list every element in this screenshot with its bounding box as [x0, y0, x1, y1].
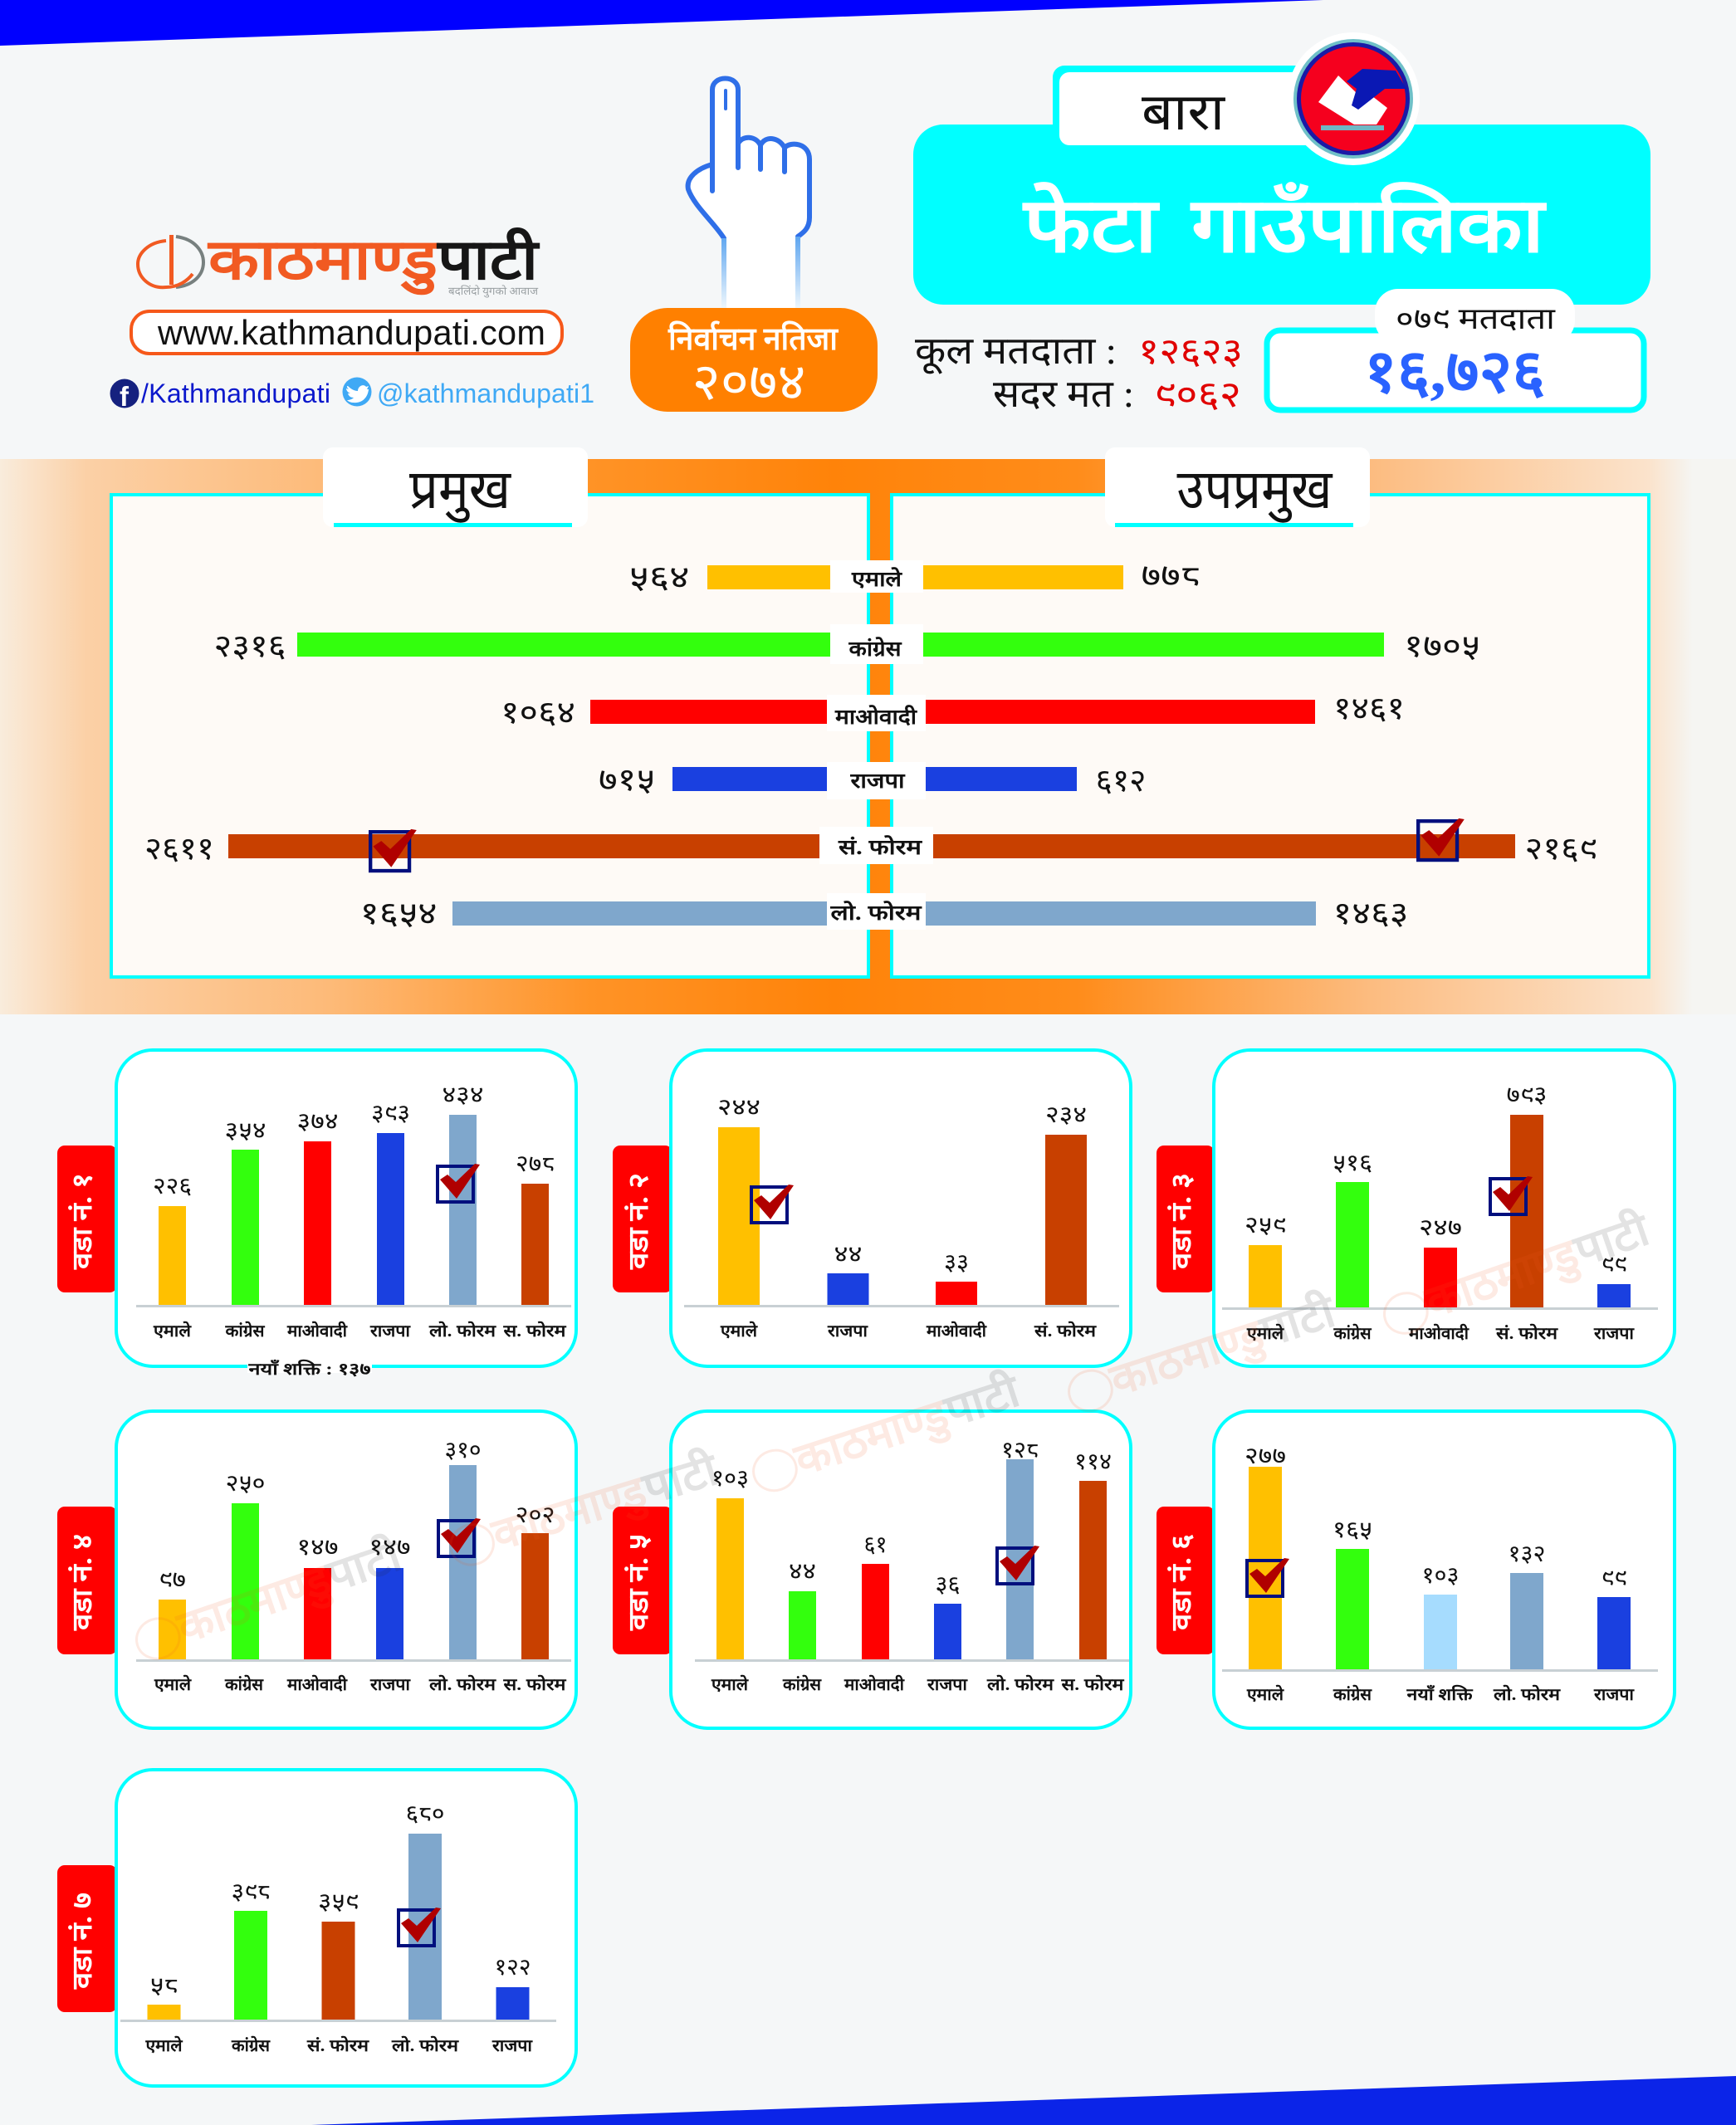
website pill: www.kathmandupati.com [157, 313, 545, 352]
ward 5 values [712, 1438, 1112, 1598]
comparison row: Congress: २३१६ [214, 629, 286, 664]
ward 3 labels [1246, 1323, 1635, 1343]
ward 1 values: २२६ [153, 1174, 192, 1199]
ward 1 card [116, 1050, 576, 1366]
ward 4 labels: एमाले [154, 1674, 193, 1694]
ward 1 note: नयाँ शक्ति : १३७ [247, 1359, 370, 1379]
watermark: logo over ward 4: काठमाण्डु [170, 1554, 340, 1656]
ward 1 labels: राजपा [369, 1322, 411, 1341]
comparison row: RJP: ७१५ [599, 763, 655, 798]
turnout value: ९०६२ [1154, 374, 1241, 415]
ward 4 labels: राजपा [369, 1676, 411, 1694]
logo: Kathmandupati [138, 227, 540, 298]
panel: ward 1 [57, 1050, 576, 1379]
ward 5 labels: लो. फोरम [986, 1674, 1054, 1694]
heading: deputy mayor [1105, 447, 1370, 527]
ward 1 bars [136, 1115, 571, 1307]
ward 6 values [1245, 1444, 1627, 1591]
icon: ballot emblem [1287, 32, 1420, 165]
ward 7 values: ६८० [405, 1801, 445, 1827]
ward 7 values: १२२ [495, 1955, 531, 1981]
watermark: logo between wards 4 and 5: काठमाण्डु [486, 1466, 654, 1564]
ward 6 values: १६५ [1333, 1517, 1372, 1543]
ward 7 labels: कांग्रेस [231, 2035, 271, 2055]
panel: ward 4 [57, 1411, 576, 1728]
ward 2 values: २४४ [717, 1095, 760, 1121]
icon: ward 1 winner check [438, 1164, 480, 1202]
comparison row: Loktantrik Forum: १४६३ [1333, 896, 1408, 931]
ward 4 values: १४७ [297, 1535, 339, 1561]
ward 7 labels: लो. फोरम [391, 2035, 459, 2055]
ward 3 labels: राजपा [1593, 1325, 1635, 1343]
ward 3 labels: माओवादी [1408, 1323, 1469, 1343]
icon: ward 3 winner check [1490, 1176, 1533, 1214]
ward 5 labels: राजपा [927, 1676, 968, 1694]
ward 6 values: २७७ [1245, 1444, 1286, 1469]
municipality title: फेटा [1022, 182, 1161, 268]
ward 7 values: ३५९ [318, 1889, 359, 1915]
ward 6 tab [1157, 1507, 1215, 1654]
watermark: logo between wards 2 and 3: पाटी [1253, 1284, 1342, 1357]
comparison row: RJP: ६१२ [1096, 764, 1146, 799]
ward 1 tab [57, 1146, 117, 1292]
ward 1 values: ३७४ [297, 1109, 339, 1135]
comparison row: Sanghiya Forum: २१६९ [1524, 832, 1597, 867]
comparison row: Congress: १७०५ [1404, 629, 1480, 664]
municipality title [1022, 182, 1548, 268]
ward 4 labels: कांग्रेस [224, 1674, 264, 1694]
ward 7 labels [144, 2035, 533, 2055]
icon: ward 2 winner check [751, 1185, 794, 1223]
comparison row: Congress [214, 624, 1480, 664]
panel: deputy mayor [892, 495, 1649, 977]
comparison row: RJP: राजपा [849, 770, 906, 793]
ward 7 tab [57, 1865, 117, 2012]
ward 6 labels [1246, 1684, 1635, 1704]
ward 2 labels: सं. फोरम [1034, 1321, 1097, 1341]
voters box heading tab [1375, 289, 1575, 344]
ward 5 bars [695, 1459, 1129, 1662]
comparison row: UML [629, 559, 1201, 595]
ward 5 values: १०३ [712, 1466, 749, 1492]
comparison row: Sanghiya Forum [144, 827, 1597, 867]
ward 4 tab [57, 1507, 117, 1654]
municipality title: गाउँपालिका [1190, 182, 1548, 268]
icon: twitter [342, 377, 372, 407]
watermark: logo between wards 4 and 5 [443, 1443, 726, 1576]
watermark: logo over ward 5 [746, 1364, 1028, 1502]
ward 7 labels: राजपा [491, 2037, 533, 2055]
ward 3 values: ९९ [1601, 1252, 1627, 1277]
ward 4 values: २०२ [515, 1502, 555, 1528]
ward 4 values: २५० [226, 1471, 266, 1497]
panel: ward 2 [613, 1050, 1131, 1366]
bottom blue corner band [311, 2076, 1736, 2125]
ward 6 card [1214, 1411, 1675, 1728]
icon: facebook [110, 379, 139, 412]
watermark: logo over ward 5: काठमाण्डु [788, 1389, 957, 1489]
comparison row: Maoist [501, 691, 1405, 731]
ward 5 labels: माओवादी [844, 1674, 905, 1694]
ward 1 labels: माओवादी [286, 1321, 348, 1341]
ward 3 values: २५९ [1245, 1213, 1286, 1238]
watermark: logo between wards 4 and 5: पाटी [636, 1443, 725, 1514]
ward 4 bars [136, 1465, 571, 1662]
ward 1 values: ३५४ [224, 1118, 266, 1144]
comparison row: Sanghiya Forum: सं. फोरम [838, 835, 922, 859]
district tab [1053, 66, 1362, 149]
ward 6 values: १३२ [1508, 1541, 1546, 1567]
ward 3 labels: एमाले [1246, 1323, 1285, 1343]
ward 2 bars [684, 1127, 1119, 1307]
heading: deputy mayor: उपप्रमुख [1177, 460, 1333, 523]
ward 3 tab: वडा नं. ३ [1167, 1173, 1197, 1270]
twitter handle: @kathmandupati1 [377, 379, 594, 408]
badge heading: निर्वाचन नतिजा [668, 320, 839, 357]
ward 4 labels: स. फोरम [502, 1674, 567, 1694]
comparison row: UML: ५६४ [629, 560, 689, 595]
ward 1 tab: वडा नं. १ [68, 1173, 98, 1270]
icon: ward 6 winner check [1247, 1558, 1289, 1596]
ward 5 values: ११४ [1074, 1449, 1112, 1475]
voter summary [915, 330, 1243, 415]
ward 2 values: ४४ [834, 1242, 862, 1268]
ward 4 labels: माओवादी [286, 1674, 348, 1694]
ward 1 labels [153, 1321, 567, 1341]
total voters value: १२६२३ [1138, 331, 1243, 372]
ward 7 labels: एमाले [144, 2035, 183, 2055]
ward 1 labels: स. फोरम [502, 1321, 567, 1341]
ward 7 bars [120, 1834, 556, 2022]
ward 2 labels [720, 1321, 1097, 1341]
icon: deputy winner check [1418, 818, 1465, 860]
icon: mayor winner check [370, 829, 417, 871]
ward 7 values: ३९८ [231, 1879, 271, 1905]
heading: mayor [323, 447, 588, 527]
ward 2 values: ३३ [944, 1250, 969, 1276]
ward 2 card [671, 1050, 1131, 1366]
watermark: logo between wards 2 and 3: काठमाण्डु [1103, 1309, 1273, 1409]
ward 7 values [149, 1801, 531, 1999]
ward 7 labels: सं. फोरम [306, 2035, 369, 2055]
ward 7 values: ५८ [149, 1973, 178, 1999]
panel: ward 6 [1157, 1411, 1675, 1728]
comparison row: Maoist: १४६१ [1333, 691, 1405, 726]
ward 7 card [116, 1770, 576, 2086]
logo wordmark: काठमाण्डु [207, 228, 440, 296]
ward 1 labels: कांग्रेस [224, 1321, 266, 1341]
panel: ward 5 [613, 1411, 1131, 1728]
ward 2 tab [613, 1146, 672, 1292]
turnout: सदर मत : [993, 373, 1134, 415]
voters box value: १६,७२६ [1364, 339, 1545, 405]
ward 6 labels: राजपा [1593, 1686, 1635, 1704]
heading: mayor: प्रमुख [409, 460, 511, 523]
ward 4 card [116, 1411, 576, 1728]
ward 6 values: १०३ [1421, 1563, 1460, 1589]
ward 5 values: ४४ [789, 1559, 816, 1585]
ward 5 values: ३६ [935, 1572, 960, 1598]
comparison row: UML: ७७८ [1141, 559, 1201, 594]
watermark: logo between wards 2 and 3 [1061, 1284, 1343, 1423]
icon: ward 5 winner check [997, 1546, 1039, 1584]
ward 4 values: ९७ [159, 1567, 186, 1593]
icon: ward 4 winner check [438, 1518, 481, 1556]
icon: facebook: f [120, 381, 130, 412]
ward 4 values [159, 1438, 555, 1593]
2079 voters box [1267, 289, 1644, 410]
ward 2 labels: एमाले [720, 1321, 759, 1341]
top blue corner band [0, 0, 1323, 46]
facebook handle: /Kathmandupati [141, 379, 330, 408]
icon: logo globe [138, 235, 203, 287]
ward 6 labels: एमाले [1246, 1684, 1285, 1704]
logo tagline: बदलिंदो युगको आवाज [448, 285, 538, 298]
ward 1 values: ४३४ [442, 1082, 483, 1108]
result badge [630, 308, 878, 412]
ward 1 values [153, 1082, 555, 1199]
watermark: logo over ward 5: पाटी [937, 1364, 1027, 1437]
panel: ward 3 [1157, 1050, 1675, 1366]
comparison row: Maoist: १०६४ [501, 696, 575, 730]
ward 1 labels: लो. फोरम [428, 1321, 496, 1341]
comparison row: RJP [599, 762, 1146, 799]
watermark: logo over ward 4: पाटी [319, 1528, 409, 1602]
panel: ward 7 [57, 1770, 576, 2086]
district tab: बारा [1142, 85, 1225, 141]
ward 3 tab [1157, 1146, 1215, 1292]
social handles [110, 377, 594, 412]
ward 1 values: २७८ [516, 1151, 555, 1177]
watermark: logo over ward 3 [1377, 1203, 1658, 1346]
ward 5 labels: एमाले [711, 1674, 750, 1694]
ward 6 tab: वडा नं. ६ [1167, 1534, 1197, 1631]
watermark: logo over ward 3: काठमाण्डु [1418, 1229, 1587, 1331]
ward 1 values: ३९३ [371, 1101, 410, 1126]
ward 1 labels: एमाले [153, 1321, 193, 1341]
logo wordmark end: पाटी [436, 227, 540, 291]
comparison row: Loktantrik Forum: लो. फोरम [829, 901, 922, 925]
watermark: logo over ward 4 [129, 1528, 410, 1671]
ward 5 labels [711, 1674, 1125, 1694]
ward 2 tab: वडा नं. २ [624, 1173, 654, 1270]
ward 3 card [1214, 1050, 1675, 1366]
ward 5 values: १२८ [1001, 1438, 1039, 1463]
ward 2 values [717, 1095, 1087, 1276]
comparison row: Congress: कांग्रेस [848, 637, 902, 661]
ward 3 bars [1222, 1115, 1658, 1310]
watermark: logo over ward 3: पाटी [1567, 1203, 1657, 1277]
ward 5 tab [613, 1507, 672, 1654]
ward 5 labels: कांग्रेस [782, 1674, 822, 1694]
ward 4 labels [154, 1674, 567, 1694]
title panel [913, 32, 1650, 305]
ward 3 values: ७९३ [1506, 1082, 1548, 1108]
ward 3 values: ५१६ [1333, 1150, 1372, 1176]
comparison row: UML: एमाले [851, 567, 902, 591]
ward 3 values [1245, 1082, 1627, 1277]
ward 2 values: २३४ [1045, 1102, 1087, 1128]
ward 5 values: ६१ [863, 1532, 887, 1558]
ward 3 labels: सं. फोरम [1495, 1323, 1558, 1343]
voters box heading: ०७९ मतदाता [1396, 302, 1556, 335]
ward 3 labels: कांग्रेस [1333, 1323, 1372, 1343]
icon: ward 7 winner check [399, 1908, 441, 1946]
panel: mayor [111, 495, 868, 977]
ward 4 values: ३१० [445, 1438, 482, 1463]
ward 6 labels: कांग्रेस [1333, 1684, 1372, 1704]
icon: voting hand [688, 78, 809, 309]
ward 5 card [671, 1411, 1131, 1728]
comparison row: Loktantrik Forum [360, 893, 1408, 931]
comparison row: Maoist: माओवादी [834, 705, 918, 729]
badge year: २०७४ [692, 354, 805, 411]
ward 2 labels: माओवादी [926, 1321, 987, 1341]
total voters: कूल मतदाता : [915, 330, 1117, 374]
ward 5 tab: वडा नं. ५ [624, 1534, 654, 1631]
ward 7 tab: वडा नं. ७ [68, 1893, 98, 1990]
ward 5 labels: स. फोरम [1060, 1674, 1125, 1694]
ward 3 values: २४७ [1419, 1215, 1462, 1241]
comparison row: Loktantrik Forum: १६५४ [360, 896, 437, 931]
ward 6 labels: नयाँ शक्ति [1406, 1684, 1474, 1704]
ward 6 bars [1222, 1467, 1658, 1672]
orange band [0, 459, 1736, 1014]
ward 6 values: ९९ [1601, 1566, 1627, 1591]
ward 4 labels: लो. फोरम [428, 1674, 496, 1694]
ward 4 tab: वडा नं. ४ [68, 1534, 98, 1631]
ward 2 labels: राजपा [827, 1322, 868, 1341]
ward 4 values: १४७ [369, 1535, 410, 1561]
comparison row: Sanghiya Forum: २६११ [144, 832, 214, 867]
ward 6 labels: लो. फोरम [1493, 1684, 1561, 1704]
